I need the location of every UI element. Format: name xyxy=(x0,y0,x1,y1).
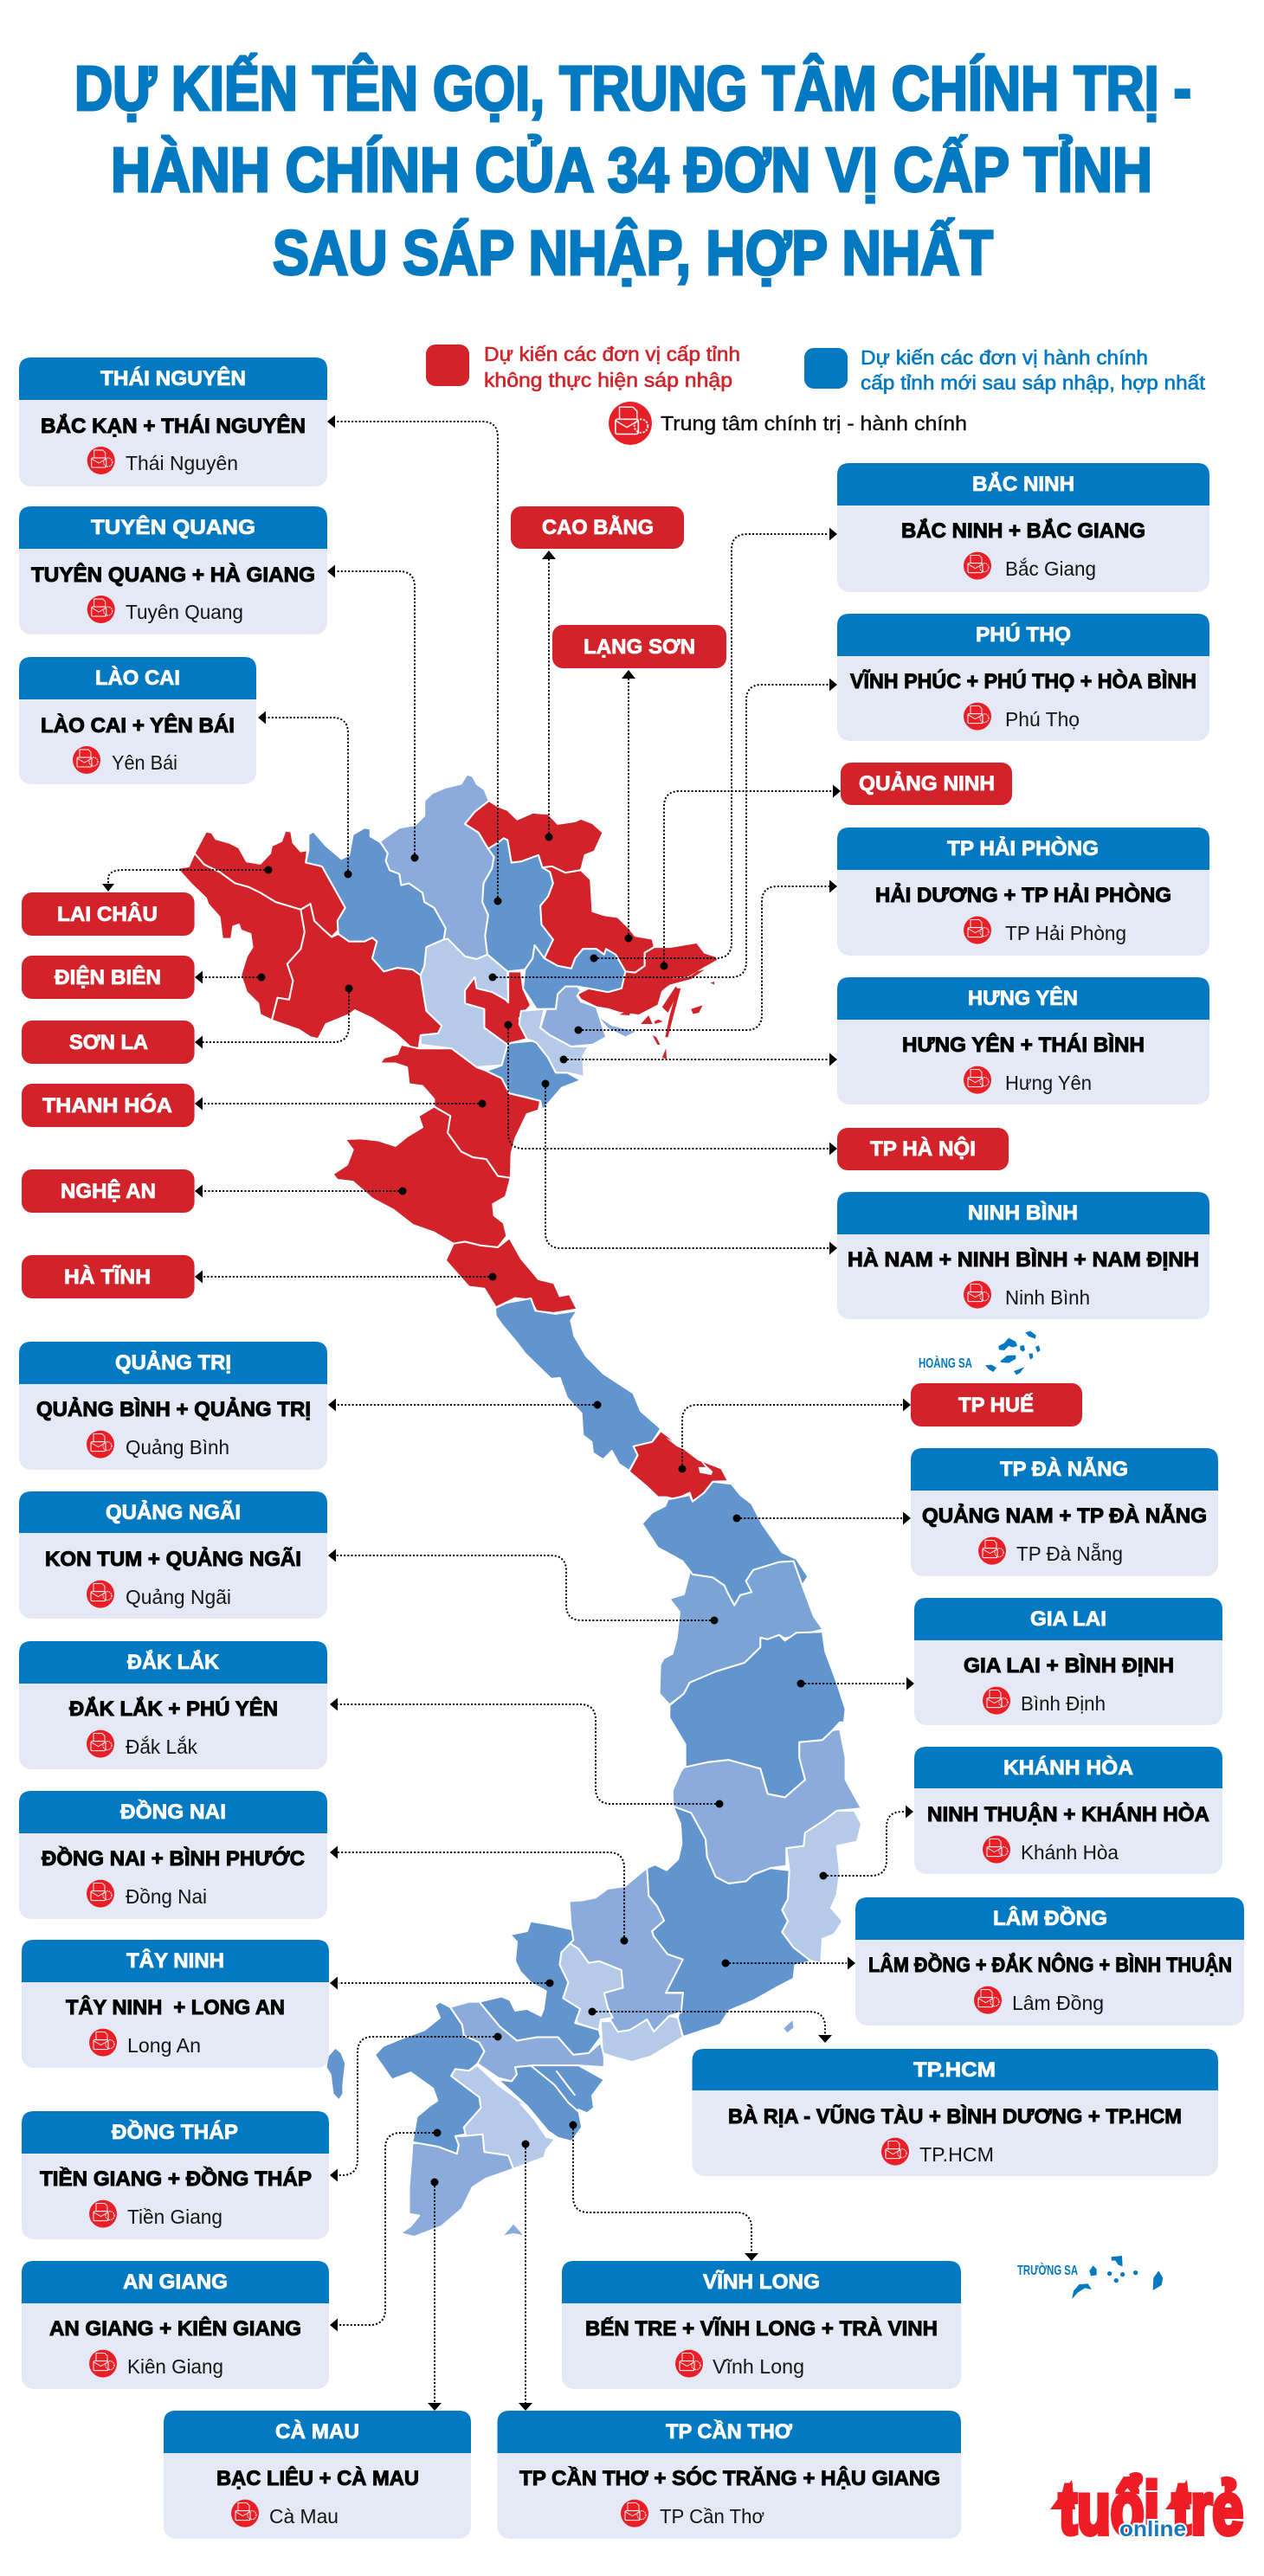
card: TP Đà Nẵng xyxy=(911,1448,1218,1576)
province: Đà Nẵng xyxy=(642,1482,808,1606)
islands: Hải Phòng xyxy=(600,1019,635,1036)
river mouth xyxy=(519,2103,555,2140)
province: Hà Nội xyxy=(465,971,531,1045)
card: TP Cần Thơ: TP CẦN THƠ + SÓC TRĂNG + HẬU GIANG xyxy=(519,2466,940,2490)
legend: centre text: Trung tâm chính trị - hành chính xyxy=(661,412,967,435)
card: Đắk Lắk: ĐẮK LẮK + PHÚ YÊN xyxy=(69,1697,278,1721)
card: Thái Nguyên xyxy=(19,357,327,486)
card: Lâm Đồng xyxy=(855,1897,1244,2025)
logo: Tuổi Trẻ Online xyxy=(1050,2468,1243,2549)
label: Thanh Hóa: THANH HÓA xyxy=(42,1093,172,1117)
card: Đồng Tháp: TIỀN GIANG + ĐỒNG THÁP xyxy=(40,2167,312,2191)
card: TP Đà Nẵng: TP ĐÀ NẴNG xyxy=(1000,1457,1128,1481)
province: Lai Châu xyxy=(195,831,345,937)
card: Đồng Tháp: Tiền Giang xyxy=(127,2206,222,2228)
province: Lào Cai xyxy=(306,828,446,976)
province: Điện Biên xyxy=(177,853,305,1021)
province: Lâm Đồng xyxy=(647,1806,811,2037)
label: Nghệ An xyxy=(22,1169,195,1213)
card: Lào Cai: LÀO CAI + YÊN BÁI xyxy=(41,713,235,737)
card: Ninh Bình: HÀ NAM + NINH BÌNH + NAM ĐỊNH xyxy=(848,1247,1199,1272)
card: Vĩnh Long xyxy=(562,2261,961,2389)
map: northern provinces xyxy=(177,775,719,1313)
card: Tuyên Quang: TUYÊN QUANG + HÀ GIANG xyxy=(31,563,315,587)
card: TP Cần Thơ: TP CẦN THƠ xyxy=(666,2419,793,2444)
province: Tây Ninh xyxy=(480,1922,601,2055)
card: TP Hải Phòng xyxy=(837,828,1209,956)
card: Hưng Yên: Hưng Yên xyxy=(1005,1072,1092,1094)
card: Khánh Hòa: KHÁNH HÒA xyxy=(1003,1755,1133,1780)
label: Lạng Sơn: LẠNG SƠN xyxy=(584,635,695,659)
card: Gia Lai: GIA LAI + BÌNH ĐỊNH xyxy=(964,1653,1174,1678)
province: Tuyên Quang xyxy=(380,775,494,959)
province: Đồng Tháp xyxy=(450,2002,604,2082)
title: SAU SÁP NHẬP, HỢP NHẤT xyxy=(273,218,993,288)
card: Đồng Tháp xyxy=(22,2111,329,2239)
card: TP Đà Nẵng: TP Đà Nẵng xyxy=(1016,1542,1123,1565)
card: Quảng Trị xyxy=(19,1342,327,1470)
label: Lạng Sơn xyxy=(552,625,726,668)
card: Tây Ninh: TÂY NINH xyxy=(126,1948,224,1973)
legend: centre icon xyxy=(609,402,652,445)
card: Lào Cai xyxy=(19,657,256,784)
card: Đắk Lắk xyxy=(19,1641,327,1769)
card: Cà Mau xyxy=(164,2411,471,2539)
card: Bắc Ninh: BẮC NINH + BẮC GIANG xyxy=(901,518,1145,543)
province: Thái Nguyên xyxy=(482,838,553,971)
card: Đồng Nai xyxy=(19,1791,327,1919)
archipelago: Hoàng Sa: HOÀNG SA xyxy=(919,1355,972,1371)
card: TP.HCM xyxy=(693,2049,1218,2176)
map: southern provinces xyxy=(327,1868,793,2237)
map: central provinces xyxy=(495,1298,861,2037)
title: HÀNH CHÍNH CỦA 34 ĐƠN VỊ CẤP TỈNH xyxy=(111,135,1152,205)
card: Tây Ninh: TÂY NINH + LONG AN xyxy=(66,1995,285,2019)
card: Hưng Yên xyxy=(837,977,1209,1104)
logo: Tuổi Trẻ Online: tuổi xyxy=(1059,2468,1159,2549)
province: Bắc Ninh xyxy=(523,945,625,1009)
card: Khánh Hòa: Khánh Hòa xyxy=(1021,1841,1119,1864)
card: Phú Thọ: PHÚ THỌ xyxy=(976,622,1071,647)
logo: Tuổi Trẻ Online: trẻ xyxy=(1172,2468,1243,2549)
island: Côn Đảo xyxy=(784,2020,793,2032)
card: Tuyên Quang xyxy=(19,506,327,634)
card: Quảng Ngãi: KON TUM + QUẢNG NGÃI xyxy=(45,1546,301,1571)
card: An Giang xyxy=(22,2261,329,2389)
card: Bắc Ninh: BẮC NINH xyxy=(972,472,1074,496)
card: An Giang: AN GIANG + KIÊN GIANG xyxy=(49,2316,301,2341)
province: Đắk Lắk xyxy=(673,1729,861,1884)
label: Điện Biên xyxy=(22,956,195,999)
card: Quảng Trị: Quảng Bình xyxy=(126,1436,229,1459)
archipelago: Trường Sa xyxy=(1017,2256,1163,2299)
card: Đắk Lắk: ĐẮK LẮK xyxy=(127,1650,220,1674)
card: Vĩnh Long: VĨNH LONG xyxy=(703,2270,820,2294)
card: Bắc Ninh xyxy=(837,463,1209,592)
label: Quảng Ninh: QUẢNG NINH xyxy=(859,770,995,795)
card: TP.HCM: BÀ RỊA - VŨNG TÀU + BÌNH DƯƠNG + TP.HCM xyxy=(728,2104,1182,2128)
card: Đồng Tháp: ĐỒNG THÁP xyxy=(112,2120,238,2144)
card: Vĩnh Long: Vĩnh Long xyxy=(713,2355,804,2378)
province: Cần Thơ xyxy=(451,2065,555,2169)
card: Phú Thọ xyxy=(837,614,1209,741)
province: Cao Bằng xyxy=(465,801,603,873)
card: Cà Mau: Cà Mau xyxy=(269,2505,339,2528)
card: Thái Nguyên: Thái Nguyên xyxy=(126,452,238,474)
card: Đồng Nai: Đồng Nai xyxy=(126,1885,207,1908)
card: Ninh Bình: NINH BÌNH xyxy=(968,1201,1078,1225)
islands: Quảng Ninh xyxy=(620,969,714,1059)
province: Hà Tĩnh xyxy=(446,1238,577,1313)
card: Thái Nguyên: THÁI NGUYÊN xyxy=(100,366,246,390)
label: Hà Tĩnh: HÀ TĨNH xyxy=(64,1265,151,1289)
card: TP.HCM: TP.HCM xyxy=(919,2143,994,2166)
card: Gia Lai: GIA LAI xyxy=(1030,1607,1106,1631)
card: Tây Ninh: Long An xyxy=(127,2034,201,2057)
card: Tuyên Quang: Tuyên Quang xyxy=(126,601,243,623)
province: Hải Phòng xyxy=(540,987,606,1046)
province: Vĩnh Long xyxy=(498,2065,604,2141)
province: Khánh Hòa xyxy=(782,1811,861,1963)
label: Cao Bằng: CAO BẰNG xyxy=(542,515,654,539)
card: Thái Nguyên: BẮC KẠN + THÁI NGUYÊN xyxy=(41,414,306,438)
card: Quảng Trị: QUẢNG TRỊ xyxy=(115,1349,231,1375)
rivers: Vĩnh Long xyxy=(531,2065,580,2113)
card: Lào Cai: Yên Bái xyxy=(112,751,177,774)
card: Phú Thọ: Phú Thọ xyxy=(1005,708,1080,731)
card: TP.HCM: TP.HCM xyxy=(913,2058,996,2082)
logo: Tuổi Trẻ Online: online xyxy=(1119,2517,1186,2541)
card: Quảng Trị: QUẢNG BÌNH + QUẢNG TRỊ xyxy=(36,1396,311,1421)
province: Nghệ An xyxy=(332,1106,511,1247)
card: Hưng Yên: HƯNG YÊN xyxy=(968,986,1078,1010)
label: Điện Biên: ĐIỆN BIÊN xyxy=(55,965,161,989)
legend: blue text xyxy=(861,346,1206,394)
legend: blue text: Dự kiến các đơn vị hành chính xyxy=(861,346,1148,369)
card: TP Hải Phòng: TP Hải Phòng xyxy=(1005,922,1126,944)
label: Nghệ An: NGHỆ AN xyxy=(61,1179,156,1203)
card: Cà Mau: CÀ MAU xyxy=(275,2419,359,2444)
legend: red text: Dự kiến các đơn vị cấp tỉnh xyxy=(484,343,740,365)
province: Ninh Bình xyxy=(487,1041,581,1111)
card: Ninh Bình: Ninh Bình xyxy=(1005,1286,1090,1309)
card: Đồng Nai: ĐỒNG NAI + BÌNH PHƯỚC xyxy=(42,1846,305,1871)
label: TP Huế xyxy=(911,1383,1082,1426)
card: Bắc Ninh: Bắc Giang xyxy=(1005,557,1096,580)
card: Ninh Bình xyxy=(837,1192,1209,1319)
card: Lào Cai: LÀO CAI xyxy=(95,666,180,690)
province: Lạng Sơn xyxy=(540,866,655,973)
legend: red swatch xyxy=(426,345,469,386)
province: Quảng Ninh xyxy=(577,943,719,1015)
island: Nam Du xyxy=(504,2225,523,2235)
province: Quảng Ngãi xyxy=(660,1562,823,1704)
label: Lai Châu: LAI CHÂU xyxy=(57,902,158,926)
label: Thanh Hóa xyxy=(22,1084,195,1127)
lagoon: Huế xyxy=(666,1438,687,1451)
archipelago: Hoàng Sa xyxy=(919,1331,1041,1375)
legend: red text: không thực hiện sáp nhập xyxy=(484,369,732,391)
island: Phú Quốc xyxy=(327,2049,345,2099)
province: Phú Thọ xyxy=(421,939,508,1067)
card: Quảng Ngãi: Quảng Ngãi xyxy=(126,1586,231,1608)
card: TP Cần Thơ: TP Cần Thơ xyxy=(660,2505,764,2528)
label: TP Hà Nội: TP HÀ NỘI xyxy=(870,1137,976,1161)
province: Thanh Hóa xyxy=(380,1045,540,1178)
card: TP Cần Thơ xyxy=(497,2411,961,2539)
card: TP Đà Nẵng: QUẢNG NAM + TP ĐÀ NẴNG xyxy=(922,1503,1207,1528)
card: Khánh Hòa xyxy=(914,1747,1222,1874)
card: Đắk Lắk: Đắk Lắk xyxy=(126,1736,197,1758)
label: TP Huế: TP HUẾ xyxy=(958,1393,1034,1417)
label: Lai Châu xyxy=(22,892,195,936)
card: Phú Thọ: VĨNH PHÚC + PHÚ THỌ + HÒA BÌNH xyxy=(850,669,1196,693)
leader lines xyxy=(108,422,906,2403)
province: An Giang xyxy=(375,2002,484,2154)
province: Hưng Yên xyxy=(519,1009,589,1077)
province: Gia Lai xyxy=(669,1632,846,1798)
province: Cà Mau xyxy=(401,2135,513,2237)
card: Cà Mau: BẠC LIÊU + CÀ MAU xyxy=(216,2466,419,2490)
legend: blue swatch xyxy=(804,348,848,389)
card: Hưng Yên: HƯNG YÊN + THÁI BÌNH xyxy=(902,1033,1145,1057)
province: Quảng Trị xyxy=(495,1298,661,1471)
province: Huế xyxy=(629,1431,736,1502)
card: Vĩnh Long: BẾN TRE + VĨNH LONG + TRÀ VINH xyxy=(585,2316,938,2341)
card: Lâm Đồng: Lâm Đồng xyxy=(1012,1992,1104,2014)
province: TP.HCM xyxy=(559,1943,683,2062)
card: Tuyên Quang: TUYÊN QUANG xyxy=(91,515,255,539)
label: TP Hà Nội xyxy=(837,1128,1009,1170)
location dots xyxy=(258,833,828,2186)
card: TP Hải Phòng: HẢI DƯƠNG + TP HẢI PHÒNG xyxy=(875,882,1171,907)
legend: red text xyxy=(484,343,740,391)
card: Khánh Hòa: NINH THUẬN + KHÁNH HÒA xyxy=(927,1802,1209,1826)
card: Quảng Ngãi: QUẢNG NGÃI xyxy=(106,1499,241,1524)
card: Gia Lai xyxy=(914,1598,1222,1725)
legend: blue text: cấp tỉnh mới sau sáp nhập, hợp nhất xyxy=(861,371,1206,394)
arrowheads xyxy=(102,415,914,2411)
card: Đồng Nai: ĐỒNG NAI xyxy=(120,1800,226,1824)
archipelago: Trường Sa: TRƯỜNG SA xyxy=(1017,2262,1078,2278)
label: Cao Bằng xyxy=(511,506,684,549)
card: Lâm Đồng: LÂM ĐỒNG xyxy=(993,1906,1107,1930)
label: Quảng Ninh xyxy=(841,763,1012,805)
label: Sơn La xyxy=(22,1021,195,1064)
label: Sơn La: SƠN LA xyxy=(69,1031,148,1054)
province: Đồng Nai xyxy=(570,1868,683,2032)
label: Hà Tĩnh xyxy=(22,1255,195,1298)
legend xyxy=(426,343,1206,445)
card: Quảng Ngãi xyxy=(19,1491,327,1619)
title xyxy=(74,54,1191,288)
province: Sơn La xyxy=(272,904,442,1049)
card: Gia Lai: Bình Định xyxy=(1021,1692,1106,1715)
card: An Giang: AN GIANG xyxy=(123,2270,228,2294)
card: Tây Ninh xyxy=(22,1940,329,2068)
card: An Giang: Kiên Giang xyxy=(127,2355,223,2378)
card: TP Hải Phòng: TP HẢI PHÒNG xyxy=(947,835,1099,860)
